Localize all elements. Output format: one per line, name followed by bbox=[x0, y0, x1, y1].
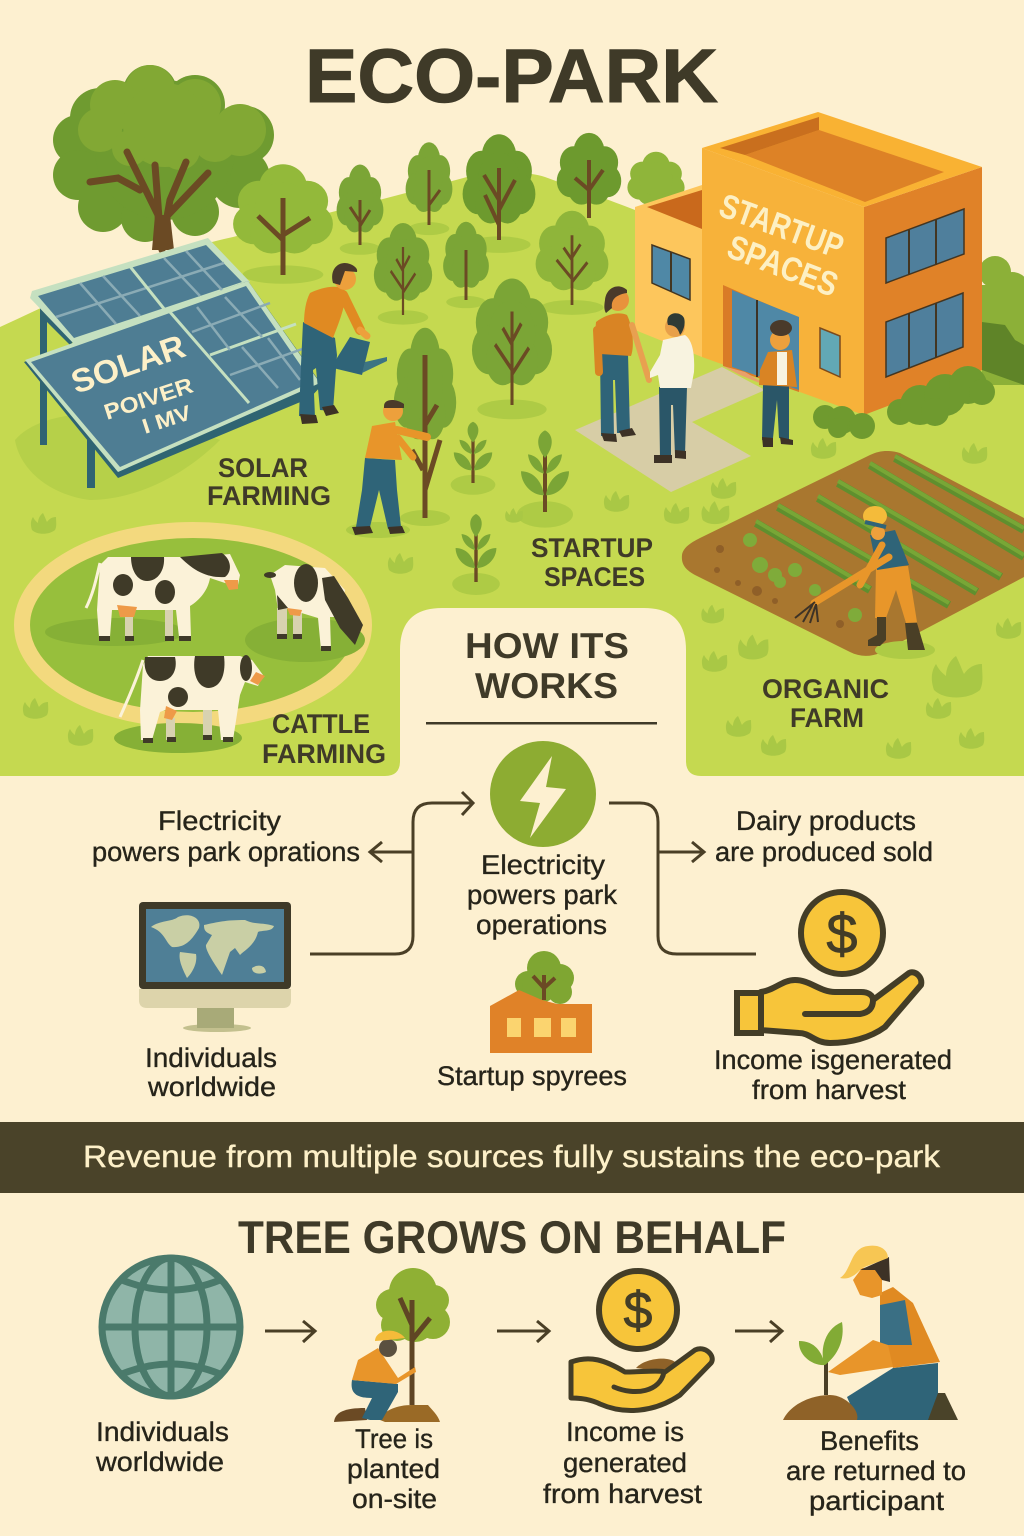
text: benefits are returned to participant: are returned to bbox=[786, 1456, 966, 1486]
text: tree is planted on-site: Tree is bbox=[355, 1424, 433, 1454]
panel shadow on ground bbox=[15, 414, 220, 500]
heading: how its works: HOW ITS bbox=[465, 625, 629, 666]
arrow bbox=[497, 1321, 549, 1342]
text: benefits are returned to participant bbox=[786, 1426, 966, 1516]
ground bbox=[0, 172, 1024, 776]
text: benefits are returned to participant: participant bbox=[809, 1486, 945, 1516]
cow 3 bbox=[120, 655, 265, 743]
label: organic farm bbox=[762, 674, 889, 733]
door bbox=[723, 285, 799, 392]
text: electricity powers park operations: powers park bbox=[467, 880, 617, 910]
solar panel lettering: SOLAR bbox=[66, 327, 190, 401]
person watering bbox=[299, 263, 387, 424]
text: benefits are returned to participant: Benefits bbox=[820, 1426, 919, 1456]
person planting bbox=[346, 400, 427, 538]
banner: Revenue from multiple sources fully sustains the eco-park bbox=[83, 1139, 941, 1174]
label: cattle farming: CATTLE bbox=[272, 709, 370, 739]
solar panel lettering: I MV bbox=[139, 401, 194, 439]
text: income is generated from harvest: Income is bbox=[566, 1417, 684, 1447]
text: individuals worldwide: Individuals bbox=[145, 1043, 277, 1073]
label: cattle farming: FARMING bbox=[262, 739, 386, 769]
planting tree bbox=[394, 328, 456, 526]
saplings bbox=[451, 422, 573, 595]
text: electricity powers park operations: operations bbox=[476, 910, 607, 940]
label: organic farm: FARM bbox=[790, 703, 864, 733]
text: tree is planted on-site: planted bbox=[347, 1454, 440, 1484]
solar panels bbox=[24, 238, 322, 488]
arrow bbox=[735, 1321, 782, 1342]
text: income is generated from harvest: from harvest bbox=[543, 1479, 703, 1509]
icon: startup building and tree bbox=[490, 951, 592, 1053]
text: electricity powers park operations bbox=[467, 850, 617, 940]
text: income is generated from harvest: generated bbox=[563, 1448, 687, 1478]
icon: electricity bolt bbox=[490, 741, 596, 847]
label: solar farming: SOLAR bbox=[218, 453, 308, 483]
cow 2 bbox=[264, 564, 363, 651]
bushes bbox=[813, 405, 875, 439]
text: startup spyrees: Startup spyrees bbox=[437, 1061, 627, 1091]
building sign: STARTUP bbox=[714, 187, 848, 267]
grass tufts bbox=[23, 438, 1021, 759]
title: ECO-PARK bbox=[305, 34, 718, 119]
label: solar farming: FARMING bbox=[207, 481, 331, 511]
icon: coin and hand bbox=[737, 892, 921, 1043]
icon: coin and hand with soil: $ bbox=[624, 1282, 653, 1340]
text: individuals worldwide: worldwide bbox=[95, 1447, 224, 1477]
label: startup spaces bbox=[531, 533, 653, 592]
text: dairy products: are produced sold bbox=[715, 837, 933, 867]
label: solar farming bbox=[207, 453, 331, 511]
arrow: electricity to income bbox=[609, 803, 756, 954]
bush right of building bbox=[979, 256, 1024, 385]
man by door bbox=[759, 320, 797, 447]
text: tree is planted on-site: on-site bbox=[352, 1484, 437, 1514]
text: flectricity bbox=[92, 806, 360, 867]
trees bbox=[233, 133, 685, 419]
icon: coin and hand with soil bbox=[571, 1271, 712, 1410]
text: income is generated from harvest bbox=[543, 1417, 703, 1509]
icon: person planting tree bbox=[334, 1268, 450, 1422]
icon: worker with seedling bbox=[783, 1246, 958, 1420]
text: income isgenerated bbox=[714, 1045, 952, 1105]
cow 1 bbox=[86, 553, 240, 641]
large tree bbox=[53, 65, 274, 250]
text: electricity powers park operations: Electricity bbox=[481, 850, 606, 880]
icon: coin and hand: $ bbox=[826, 902, 858, 965]
label: cattle farming bbox=[262, 709, 386, 769]
text: dairy products: Dairy products bbox=[736, 806, 916, 836]
label: startup spaces: STARTUP bbox=[531, 533, 653, 563]
icon: monitor bbox=[139, 902, 291, 1032]
text: individuals worldwide: worldwide bbox=[147, 1072, 276, 1102]
label: organic farm: ORGANIC bbox=[762, 674, 889, 704]
rear panel bbox=[30, 238, 250, 345]
heading: tree grows on behalf: TREE GROWS ON BEHALF bbox=[238, 1211, 786, 1263]
text: flectricity: powers park oprations bbox=[92, 837, 360, 867]
farmer bbox=[795, 506, 935, 659]
heading: how its works: WORKS bbox=[475, 665, 618, 706]
text: tree is planted on-site bbox=[347, 1424, 440, 1514]
text: individuals worldwide bbox=[95, 1417, 229, 1477]
front panel bbox=[24, 281, 322, 478]
woman bbox=[594, 286, 649, 442]
organic field bbox=[682, 451, 1024, 656]
arrow bbox=[265, 1321, 315, 1342]
text: flectricity: Flectricity bbox=[158, 806, 282, 836]
right windows bbox=[886, 209, 964, 283]
banner bbox=[0, 1122, 1024, 1193]
annex window bbox=[652, 245, 690, 300]
label: startup spaces: SPACES bbox=[544, 562, 645, 592]
solar panel lettering: POIVER bbox=[101, 373, 196, 425]
arrow: monitor to electricity bbox=[310, 792, 473, 954]
building sign: SPACES bbox=[722, 228, 843, 305]
small window bbox=[820, 328, 840, 377]
panel: eco-park scene bbox=[0, 65, 1024, 776]
pavement bbox=[575, 367, 765, 492]
text: individuals worldwide: Individuals bbox=[96, 1417, 229, 1447]
text: income isgenerated: Income isgenerated bbox=[714, 1045, 952, 1075]
building sign bbox=[714, 187, 848, 305]
text: dairy products bbox=[715, 806, 933, 867]
icon: globe bbox=[102, 1258, 240, 1396]
solar panel lettering bbox=[66, 327, 196, 439]
path ring and pasture bbox=[22, 530, 365, 753]
building: startup spaces bbox=[635, 112, 1024, 439]
man in white shirt bbox=[650, 313, 694, 463]
panel legs bbox=[40, 305, 95, 488]
text: income isgenerated: from harvest bbox=[752, 1075, 907, 1105]
text: individuals worldwide bbox=[145, 1043, 277, 1102]
heading: how its works bbox=[426, 625, 657, 724]
